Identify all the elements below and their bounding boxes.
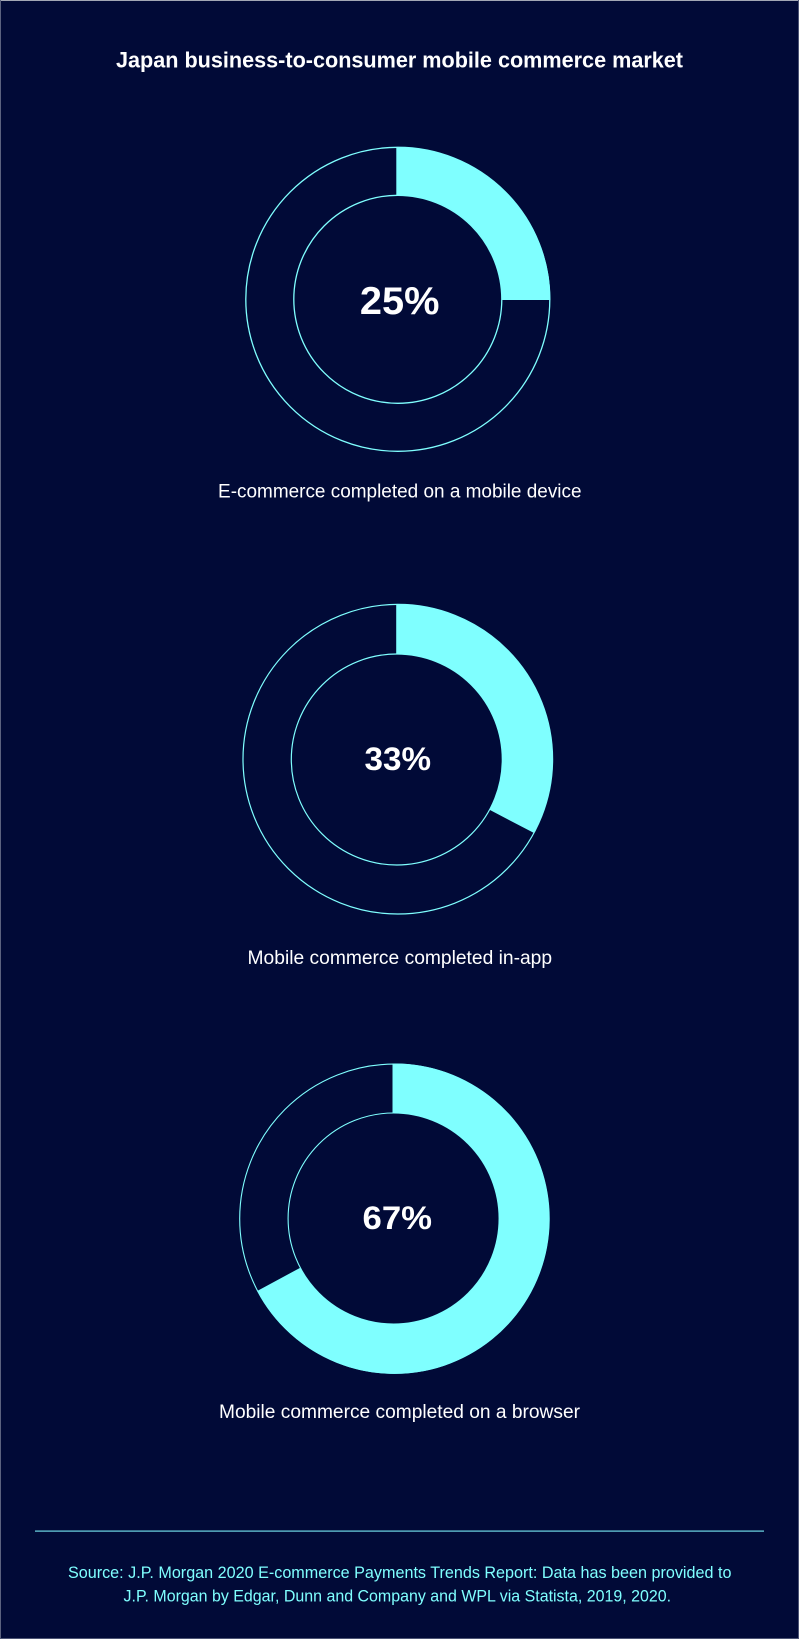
donut chart: 67% mobile commerce completed on a browser: 67%: [363, 1200, 432, 1236]
donut chart: 33% mobile commerce completed in-app: [243, 604, 553, 914]
donut chart: 67% mobile commerce completed on a browser: [240, 1063, 550, 1374]
title: Japan business-to-consumer mobile commerce market: [116, 48, 684, 73]
donut chart: 33% mobile commerce completed in-app: 33%: [365, 741, 431, 777]
donut chart: 25% e-commerce completed on a mobile device: 25%: [360, 280, 439, 323]
caption: browser: Mobile commerce completed on a browser: [219, 1402, 581, 1423]
source note: [68, 1564, 731, 1606]
donut chart: 25% e-commerce completed on a mobile device: [246, 147, 550, 451]
source note: J.P. Morgan by Edgar, Dunn and Company and WPL via Statista, 2019, 2020.: [124, 1588, 671, 1606]
source note: Source: J.P. Morgan 2020 E-commerce Payments Trends Report: Data has been provided to: [68, 1564, 731, 1582]
caption: mobile device: E-commerce completed on a mobile device: [218, 482, 582, 502]
caption: in-app: Mobile commerce completed in-app: [248, 948, 552, 969]
